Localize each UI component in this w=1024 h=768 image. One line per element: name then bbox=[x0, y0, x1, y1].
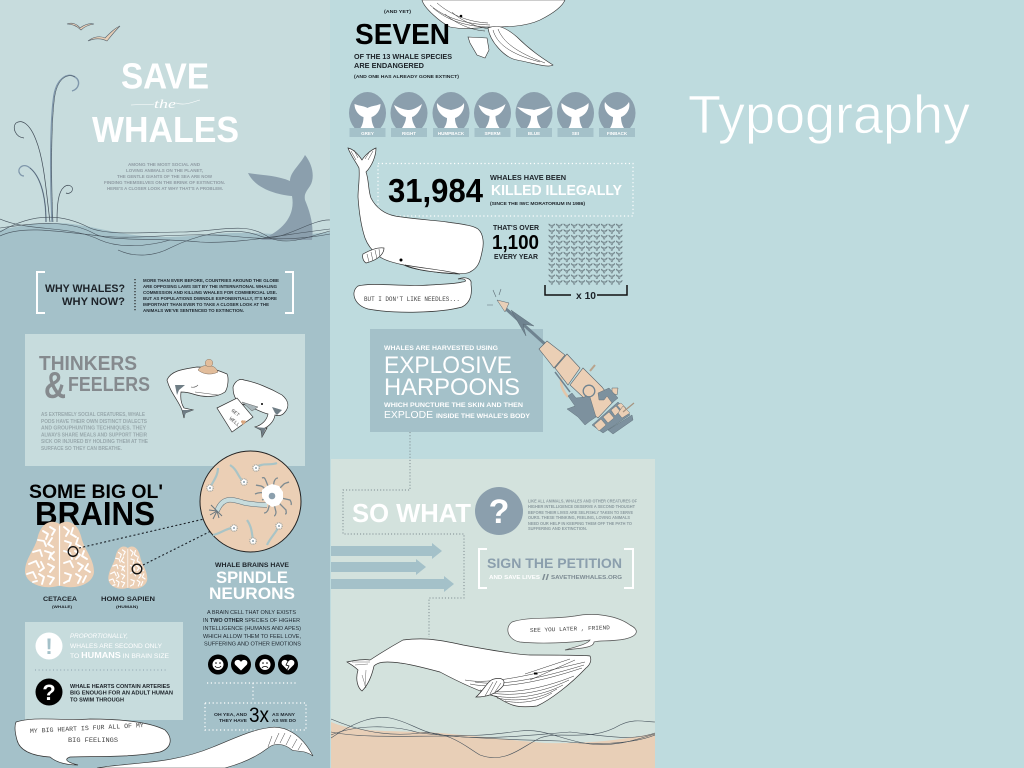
section: why whales: WHY NOW? bbox=[62, 296, 125, 308]
icon: question: ? bbox=[42, 680, 56, 705]
panel: explosive harpoons: EXPLODE bbox=[384, 410, 433, 421]
icon: exclamation bbox=[36, 632, 62, 660]
right whale: GET bbox=[230, 408, 240, 418]
callout: killed illegally box: KILLED ILLEGALLY bbox=[491, 182, 622, 199]
illustration: whale at bottom left bbox=[97, 727, 313, 768]
intro text: LOVING ANIMALS ON THE PLANET, bbox=[126, 168, 204, 174]
intro text: FINDING THEMSELVES ON THE BRINK OF EXTINCTION. bbox=[104, 180, 225, 186]
so what body text: NEED OUR HELP IN KEEPING THEM OFF THE PATH TO bbox=[528, 521, 632, 526]
brain labels: (HUMAN) bbox=[116, 604, 139, 609]
species: sperm: SPERM bbox=[484, 131, 501, 136]
icon: question bbox=[36, 678, 62, 706]
title: SAVE bbox=[121, 56, 209, 96]
species: humpback bbox=[432, 92, 470, 137]
intro text: AMONG THE MOST SOCIAL AND bbox=[128, 162, 201, 168]
stat: 1,100 every year: THAT'S OVER bbox=[493, 223, 540, 232]
panel: left sea background bbox=[0, 223, 330, 768]
spindle neurons text: SUFFERING AND OTHER EMOTIONS bbox=[204, 642, 301, 648]
thinkers body text bbox=[41, 412, 148, 452]
callout: 3x as many: AS MANY bbox=[272, 712, 295, 717]
panel: explosive harpoons: EXPLOSIVE bbox=[384, 352, 512, 379]
stat: 1,100 every year: 1,100 bbox=[492, 232, 539, 254]
brain labels: CETACEA bbox=[43, 596, 77, 603]
call to action: sign the petition: // bbox=[542, 573, 550, 582]
call to action: sign the petition: AND SAVE LIVES bbox=[489, 575, 540, 581]
illustration: top whale bbox=[422, 0, 565, 66]
panel: explosive harpoons: WHICH PUNCTURE THE SKIN AND THEN bbox=[384, 402, 523, 409]
section: why whales: WHY WHALES? bbox=[45, 283, 125, 295]
callout: 3x as many: 3x bbox=[249, 704, 269, 727]
heading: some big ol' brains: BRAINS bbox=[35, 495, 155, 532]
dotted flow line bbox=[343, 432, 464, 637]
heading: seven species: (AND YET) bbox=[384, 9, 412, 14]
thinkers body text: AND GROUPHUNTING TECHNIQUES. THEY bbox=[41, 426, 146, 432]
spindle neurons text: INTELLIGENCE (HUMANS AND APES) bbox=[203, 626, 301, 632]
thinkers body text: ALWAYS SHARE MEALS AND SUPPORT THEIR bbox=[41, 432, 147, 438]
heading: typography: Typography bbox=[688, 85, 970, 145]
so what body text: BEFORE THEIR LIVES ARE SELFISHLY TAKEN TO SERVE bbox=[528, 510, 633, 515]
speech bubble: big heart bbox=[15, 719, 170, 765]
title: the bbox=[154, 96, 176, 111]
heading: seven species: SEVEN bbox=[355, 19, 450, 51]
call to action: sign the petition: SAVETHEWHALES.ORG bbox=[551, 575, 623, 581]
callout: killed illegally box: WHALES HAVE BEEN bbox=[490, 173, 566, 182]
so what body text bbox=[528, 498, 637, 531]
section: why whales: MORE THAN EVER BEFORE, COUNTRIES AROUND THE GLOBE bbox=[143, 278, 280, 284]
illustration: blue whale bbox=[347, 639, 591, 707]
spindle neurons text: SPINDLE bbox=[216, 568, 288, 587]
species: sei: SEI bbox=[572, 131, 579, 136]
left whale bbox=[167, 359, 228, 418]
fact: whale hearts: TO SWIM THROUGH bbox=[70, 698, 124, 704]
fact: proportionally: TO HUMANS IN BRAIN SIZE bbox=[70, 651, 169, 660]
species: blue: BLUE bbox=[528, 131, 540, 136]
so what body text: LIKE ALL ANIMALS, WHALES AND OTHER CREATURES OF bbox=[528, 498, 637, 504]
fact: whale hearts: WHALE HEARTS CONTAIN ARTERIES bbox=[70, 684, 171, 690]
section: why whales: BUT AS POPULATIONS DWINDLE EXPONENTIALLY, IT'S MORE bbox=[143, 296, 278, 302]
heading: thinkers and feelers: FEELERS bbox=[68, 374, 150, 396]
row: endangered whale species tails bbox=[349, 92, 636, 137]
right whale bbox=[217, 379, 288, 437]
speech bubble: needles: BUT I DON'T LIKE NEEDLES... bbox=[364, 296, 460, 303]
speech bubble: needles bbox=[354, 278, 471, 312]
spindle neurons text: WHALE BRAINS HAVE bbox=[215, 562, 289, 569]
callout: 3x as many: AS WE DO bbox=[272, 718, 296, 723]
callout: killed illegally box bbox=[378, 164, 633, 216]
species: grey bbox=[349, 92, 386, 137]
fact: proportionally: PROPORTIONALLY, bbox=[70, 634, 128, 640]
so what body text: SUFFERING AND EXTINCTION. bbox=[528, 526, 587, 531]
spindle neurons text: IN TWO OTHER SPECIES OF HIGHER bbox=[203, 618, 300, 624]
heading: some big ol' brains: SOME BIG OL' bbox=[29, 482, 163, 503]
arrows bbox=[331, 543, 454, 592]
callout: killed illegally box: (SINCE THE IWC MORATORIUM IN 1986) bbox=[490, 201, 586, 206]
fact: proportionally: WHALES ARE SECOND ONLY bbox=[70, 644, 162, 650]
brain labels: HOMO SAPIEN bbox=[101, 596, 155, 603]
title: WHALES bbox=[92, 109, 239, 150]
illustration: whale brain bbox=[25, 522, 94, 587]
heading: seven species: OF THE 13 WHALE SPECIES bbox=[354, 54, 452, 61]
chart: grid of whale tails x10: x 10 bbox=[576, 291, 596, 302]
small neurons bbox=[207, 463, 282, 545]
heading: so what bbox=[352, 487, 523, 535]
title bbox=[92, 56, 239, 150]
panel: explosive harpoons: INSIDE THE WHALE'S BODY bbox=[436, 414, 530, 420]
wave lines: bottom bbox=[331, 717, 655, 758]
thinkers body text: PODS HAVE THEIR OWN DISTINCT DIALECTS bbox=[41, 419, 147, 425]
thinkers body text: AS EXTREMELY SOCIAL CREATURES, WHALE bbox=[41, 412, 145, 418]
section: why whales: COMMISSION AND KILLING WHALES FOR COMMERCIAL USE. bbox=[143, 290, 277, 296]
heading: so what: ? bbox=[489, 493, 509, 531]
speech bubble: big heart: BIG FEELINGS bbox=[68, 737, 118, 744]
call to action: sign the petition: SIGN THE PETITION bbox=[487, 555, 622, 571]
panel: sea floor bbox=[331, 722, 655, 768]
speech bubble: see you later: SEE YOU LATER , FRIEND bbox=[530, 624, 611, 634]
spindle neurons text: WHICH ALLOW THEM TO FEEL LOVE, bbox=[203, 634, 301, 640]
heading: some big ol' brains bbox=[29, 482, 163, 532]
section: why whales: ARE OPPOSING LAWS SET BY THE INTERNATIONAL WHALING bbox=[143, 284, 277, 290]
icon: whale tail bbox=[248, 155, 313, 240]
icon: whale spout bbox=[14, 75, 79, 222]
icon: seagulls bbox=[67, 23, 120, 41]
callout: 3x as many bbox=[205, 683, 306, 730]
intro text bbox=[104, 162, 225, 192]
spindle neurons text: NEURONS bbox=[209, 584, 295, 603]
panel: explosive harpoons: HARPOONS bbox=[384, 374, 520, 401]
section: why whales: IMPORTANT THAN EVER TO TAKE A CLOSER LOOK AT THE bbox=[143, 302, 270, 308]
panel: so what background bbox=[331, 459, 655, 768]
heading: seven species: ARE ENDANGERED bbox=[354, 63, 424, 70]
heading: so what: SO WHAT bbox=[352, 498, 471, 528]
panel: explosive harpoons: WHALES ARE HARVESTED USING bbox=[384, 345, 498, 352]
right whale: WELL bbox=[228, 416, 241, 428]
fact: whale hearts bbox=[70, 684, 173, 704]
fact: whale hearts: BIG ENOUGH FOR AN ADULT HUMAN bbox=[70, 690, 173, 696]
species: grey: GREY bbox=[361, 131, 374, 136]
thinkers body text: SICK OR INJURED BY HOLDING THEM AT THE bbox=[41, 439, 148, 445]
section: why whales bbox=[37, 272, 293, 314]
illustration: sperm whale bbox=[348, 148, 483, 274]
speech bubble: big heart: MY BIG HEART IS FUR ALL OF MY bbox=[30, 722, 144, 735]
illustration: two whales bbox=[167, 359, 288, 437]
thinkers body text: SURFACE SO THEY CAN BREATHE. bbox=[41, 446, 122, 452]
callout: 3x as many: THEY HAVE bbox=[219, 718, 247, 723]
brain labels: (WHALE) bbox=[52, 604, 73, 609]
panel: thinkers and feelers bbox=[25, 334, 305, 466]
intro text: HERE'S A CLOSER LOOK AT WHY THAT'S A PROBLEM. bbox=[107, 186, 223, 192]
speech bubble: see you later bbox=[508, 614, 636, 650]
icons: emotions bbox=[208, 654, 298, 674]
so what body text: OURS. THESE THINKING, FEELING, LOVING ANIMALS bbox=[528, 515, 630, 520]
icon: exclamation: ! bbox=[45, 634, 53, 659]
species: sei bbox=[557, 92, 594, 137]
stat: 1,100 every year bbox=[492, 223, 540, 261]
callout: 3x as many: OH YEA, AND bbox=[214, 712, 248, 717]
heading: seven species bbox=[354, 9, 460, 79]
heading: seven species: (AND ONE HAS ALREADY GONE EXTINCT) bbox=[354, 74, 460, 79]
spindle neurons text bbox=[203, 562, 301, 648]
so what body text: HIGHER INTELLIGENCE DESERVE A SECOND THOUGHT bbox=[528, 504, 635, 509]
stat: 1,100 every year: EVERY YEAR bbox=[494, 252, 539, 261]
illustration: human brain bbox=[108, 547, 147, 589]
spindle neurons text: A BRAIN CELL THAT ONLY EXISTS bbox=[207, 610, 296, 616]
section: why whales: ANIMALS WE'VE SENTENCED TO EXTINCTION. bbox=[143, 308, 244, 314]
panel: brain facts bbox=[25, 622, 183, 720]
species: right: RIGHT bbox=[402, 131, 416, 136]
species: finback bbox=[598, 92, 636, 137]
species: sperm bbox=[474, 92, 511, 137]
species: finback: FINBACK bbox=[607, 131, 628, 136]
heading: thinkers and feelers bbox=[39, 353, 150, 406]
panel: header sky bbox=[0, 0, 330, 240]
brain labels bbox=[43, 596, 155, 609]
species: right bbox=[390, 92, 428, 137]
heading: thinkers and feelers: THINKERS bbox=[39, 353, 137, 375]
species: blue bbox=[516, 92, 552, 137]
call to action: sign the petition bbox=[479, 549, 633, 588]
illustration: harpoon gun bbox=[487, 289, 634, 434]
species: humpback: HUMPBACK bbox=[438, 131, 465, 136]
fact: proportionally bbox=[70, 634, 169, 660]
chart: grid of whale tails x10 bbox=[545, 223, 627, 302]
panel: explosive harpoons bbox=[370, 329, 543, 432]
intro text: THE GENTLE GIANTS OF THE SEA ARE NOW bbox=[117, 174, 212, 180]
heading: thinkers and feelers: & bbox=[44, 365, 66, 406]
dotted connector lines bbox=[79, 519, 211, 565]
wave lines: top bbox=[0, 217, 330, 255]
illustration: neuron circle bbox=[200, 451, 301, 552]
callout: killed illegally box: 31,984 bbox=[388, 172, 484, 209]
